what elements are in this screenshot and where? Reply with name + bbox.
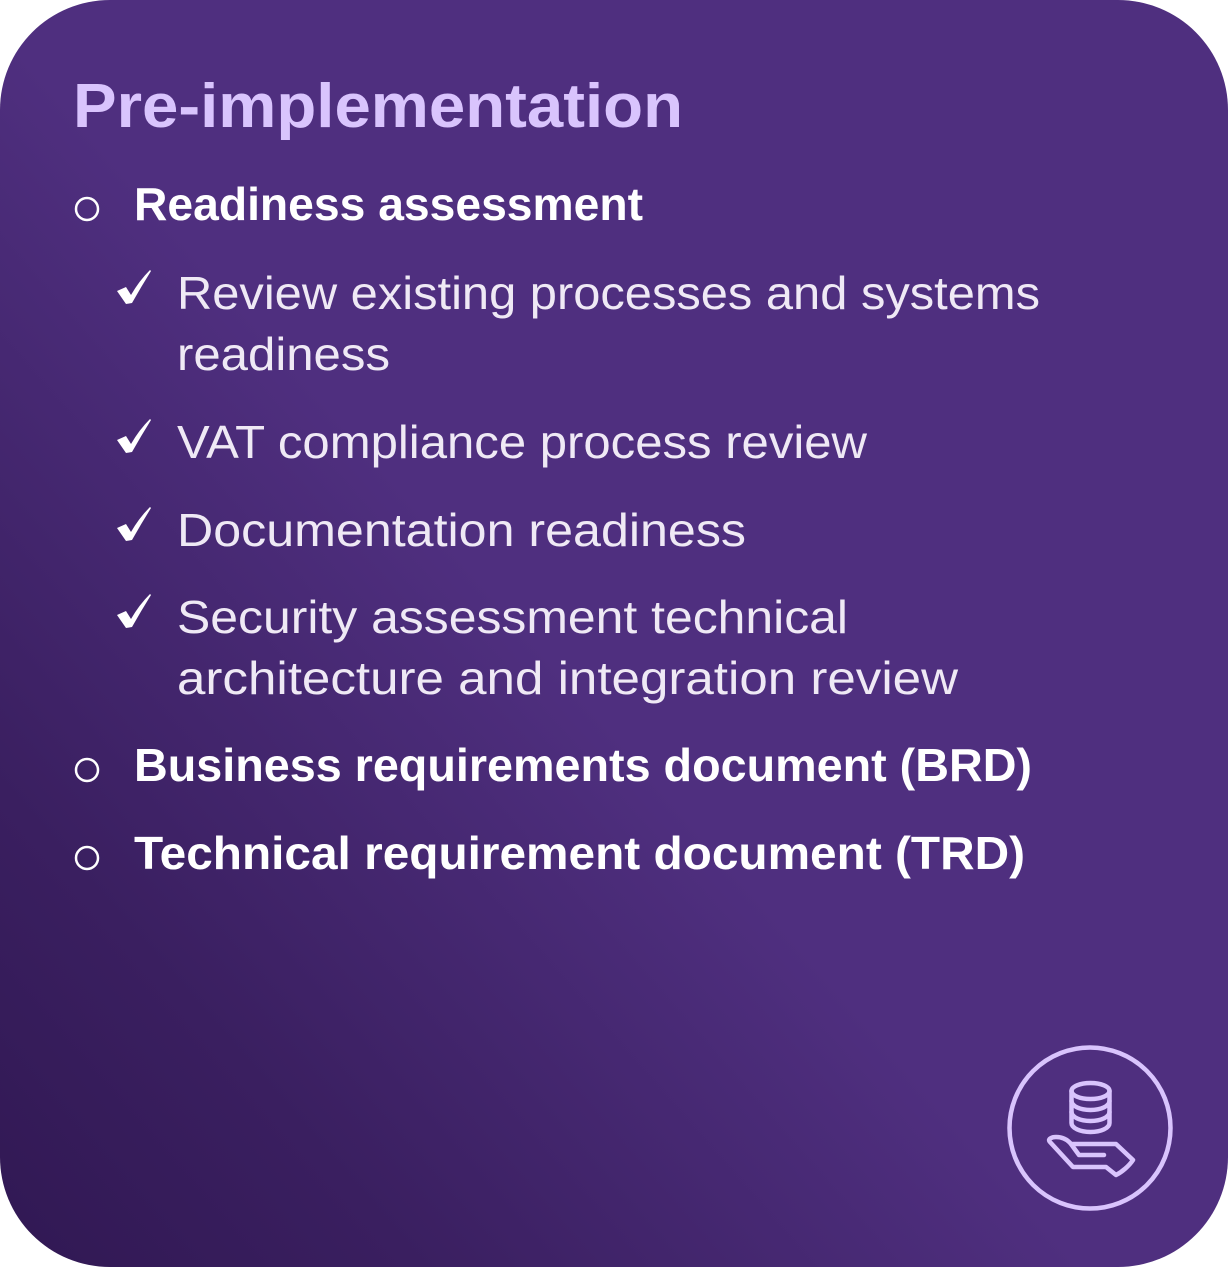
checklist item: review existing processes: Review existing processes and systems xyxy=(177,267,1040,319)
bullet: business requirements document: Business requirements document (BRD) xyxy=(134,739,1032,791)
bullet: technical requirement document: Technical requirement document (TRD) xyxy=(134,827,1025,879)
checklist item: documentation readiness: Documentation readiness xyxy=(177,504,746,556)
checklist item: security assessment: Security assessment technical xyxy=(177,591,848,643)
checklist item: review existing processes xyxy=(117,267,1040,380)
title: Pre-implementation xyxy=(73,72,683,141)
checklist item: security assessment: architecture and integration review xyxy=(177,652,959,704)
checklist item: review existing processes: readiness xyxy=(177,328,390,380)
icon: hand holding database xyxy=(1010,1048,1170,1208)
checklist item: VAT compliance: VAT compliance process review xyxy=(177,416,868,468)
checklist item: security assessment xyxy=(117,591,959,704)
bullet: readiness assessment: Readiness assessment xyxy=(134,178,643,230)
